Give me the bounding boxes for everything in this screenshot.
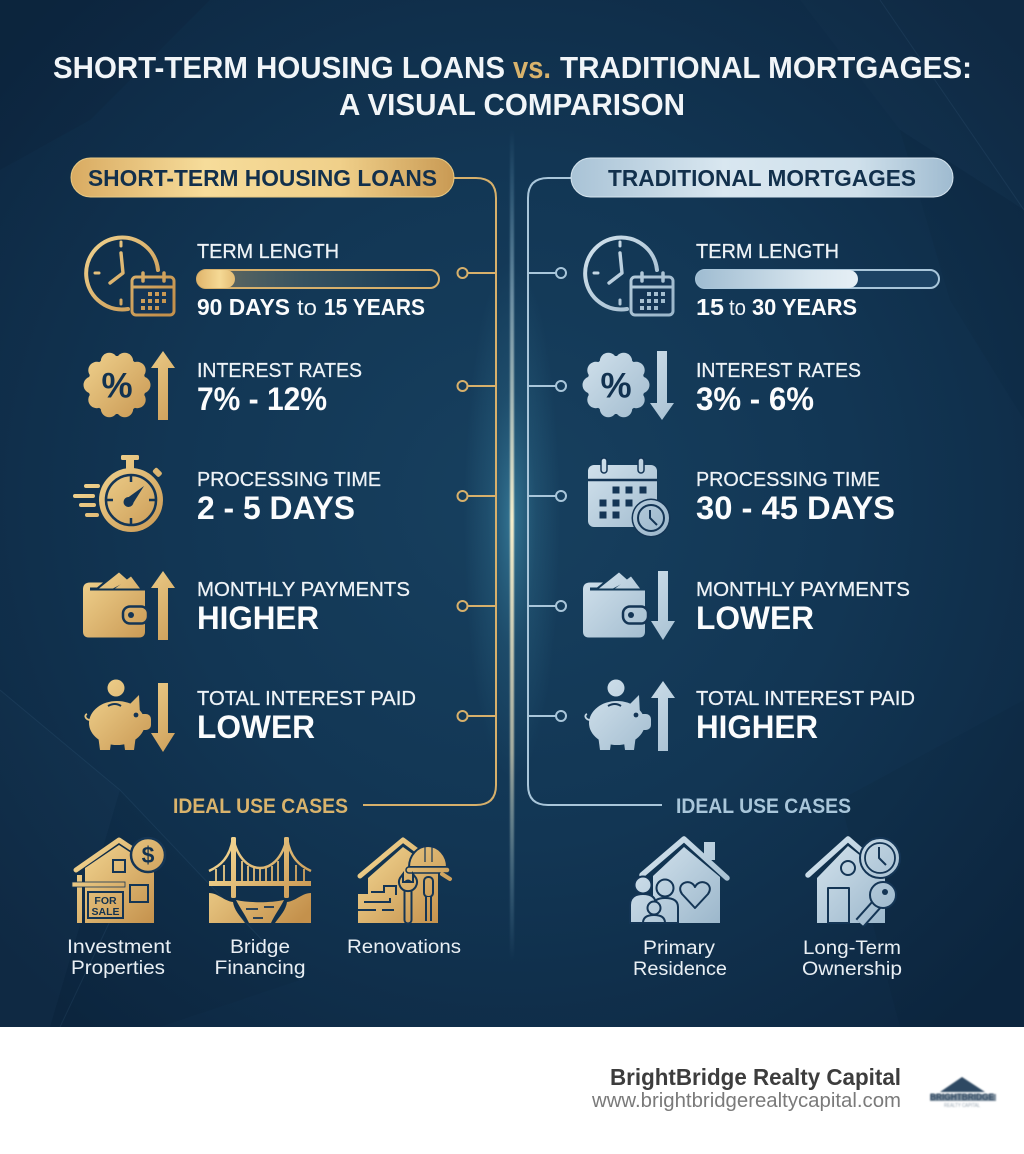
value	[696, 294, 857, 320]
use case: investment properties	[67, 838, 172, 979]
value: 7% - 12%	[197, 381, 327, 417]
row: term length	[86, 237, 439, 320]
icon: wallet with up arrow	[83, 571, 175, 640]
heading pill: SHORT-TERM HOUSING LOANS	[88, 165, 437, 191]
row: total interest paid	[85, 680, 416, 752]
icon: clock and calendar	[86, 237, 174, 315]
logo: BRIGHTBRIDGE	[930, 1092, 994, 1102]
label: MONTHLY PAYMENTS	[696, 579, 910, 601]
value: 15 YEARS	[324, 294, 425, 320]
icon: house with hard hat and tools	[358, 840, 450, 923]
row: processing time	[75, 455, 381, 532]
icon: house for sale	[72, 838, 165, 923]
icon: percent badge with up arrow: %	[101, 366, 133, 406]
heading pill	[71, 158, 454, 197]
website: www.brightbridgerealtycapital.com	[591, 1090, 901, 1112]
label: TERM LENGTH	[696, 241, 839, 263]
icon: percent badge with up arrow	[84, 351, 175, 420]
title	[53, 50, 972, 122]
title: SHORT-TERM HOUSING LOANS	[53, 50, 505, 85]
value: 15	[696, 294, 724, 320]
title: TRADITIONAL MORTGAGES:	[560, 50, 972, 85]
icon: stopwatch	[75, 455, 163, 532]
label: PROCESSING TIME	[696, 469, 880, 491]
panel: traditional mortgages	[528, 158, 953, 980]
caption: Ownership	[802, 959, 902, 980]
caption: Bridge	[230, 937, 290, 958]
heading: ideal use cases: IDEAL USE CASES	[173, 795, 348, 818]
icon: wallet with down arrow	[583, 571, 675, 640]
icon: percent badge with down arrow	[582, 351, 674, 420]
logo: REALTY CAPITAL	[944, 1103, 980, 1109]
caption	[633, 938, 727, 980]
caption: Financing	[214, 958, 306, 979]
row: term length	[585, 237, 939, 320]
logo	[930, 1077, 996, 1109]
heading pill	[571, 158, 953, 197]
value: HIGHER	[197, 600, 319, 636]
caption	[802, 938, 902, 980]
use case: renovations	[347, 840, 461, 958]
progress bar	[197, 270, 439, 288]
value: 90 DAYS	[197, 294, 290, 320]
value: to	[297, 295, 317, 320]
label: INTEREST RATES	[197, 360, 362, 382]
icon: family house	[630, 839, 727, 923]
heading pill: TRADITIONAL MORTGAGES	[608, 165, 916, 191]
title: A VISUAL COMPARISON	[339, 87, 685, 122]
label: TOTAL INTEREST PAID	[197, 688, 416, 710]
label: MONTHLY PAYMENTS	[197, 579, 410, 601]
label: PROCESSING TIME	[197, 469, 381, 491]
use case: bridge financing	[209, 837, 311, 979]
label: TERM LENGTH	[197, 241, 339, 263]
caption: Long-Term	[803, 938, 901, 959]
icon: suspension bridge	[209, 837, 311, 923]
icon: house with clock and key	[808, 838, 900, 923]
caption: Renovations	[347, 937, 461, 958]
row: interest rates	[582, 351, 861, 420]
icon: house for sale: FOR	[94, 895, 117, 907]
value: 30 YEARS	[752, 294, 857, 320]
company name: BrightBridge Realty Capital	[610, 1064, 901, 1090]
title: vs.	[513, 50, 551, 85]
value: to	[729, 295, 746, 320]
caption: Residence	[633, 959, 727, 980]
row: processing time	[588, 458, 895, 538]
value: 2 - 5 DAYS	[197, 490, 355, 526]
footer	[0, 1027, 1024, 1154]
value: LOWER	[696, 600, 814, 636]
value: HIGHER	[696, 709, 818, 745]
value: LOWER	[197, 709, 315, 745]
icon: clock and calendar	[585, 237, 673, 315]
center divider glow	[464, 130, 560, 960]
connector: right bracket	[528, 178, 662, 805]
row: monthly payments	[83, 571, 410, 640]
icon: house for sale: $	[142, 842, 155, 868]
row: interest rates	[84, 351, 362, 420]
caption: Primary	[643, 938, 716, 959]
panel: short-term housing loans	[67, 158, 496, 979]
use case: primary residence	[630, 839, 727, 980]
value: 3% - 6%	[696, 381, 814, 417]
icon: piggy bank with up arrow	[585, 680, 675, 751]
caption: Investment	[67, 937, 172, 958]
row: monthly payments	[583, 571, 910, 640]
value: 30 - 45 DAYS	[696, 490, 895, 526]
caption	[67, 937, 172, 979]
caption	[214, 937, 306, 979]
value	[197, 294, 425, 320]
row: total interest paid	[585, 680, 915, 751]
label: INTEREST RATES	[696, 360, 861, 382]
caption: Properties	[71, 958, 165, 979]
icon: percent badge with down arrow: %	[600, 366, 632, 406]
label: TOTAL INTEREST PAID	[696, 688, 915, 710]
connector: left bracket	[363, 178, 496, 805]
icon: piggy bank with down arrow	[85, 680, 175, 752]
heading: ideal use cases: IDEAL USE CASES	[676, 795, 851, 818]
icon: house for sale: SALE	[91, 906, 120, 918]
icon: calendar with clock	[588, 458, 670, 538]
use case: long-term ownership	[802, 838, 902, 980]
progress bar	[696, 270, 939, 288]
